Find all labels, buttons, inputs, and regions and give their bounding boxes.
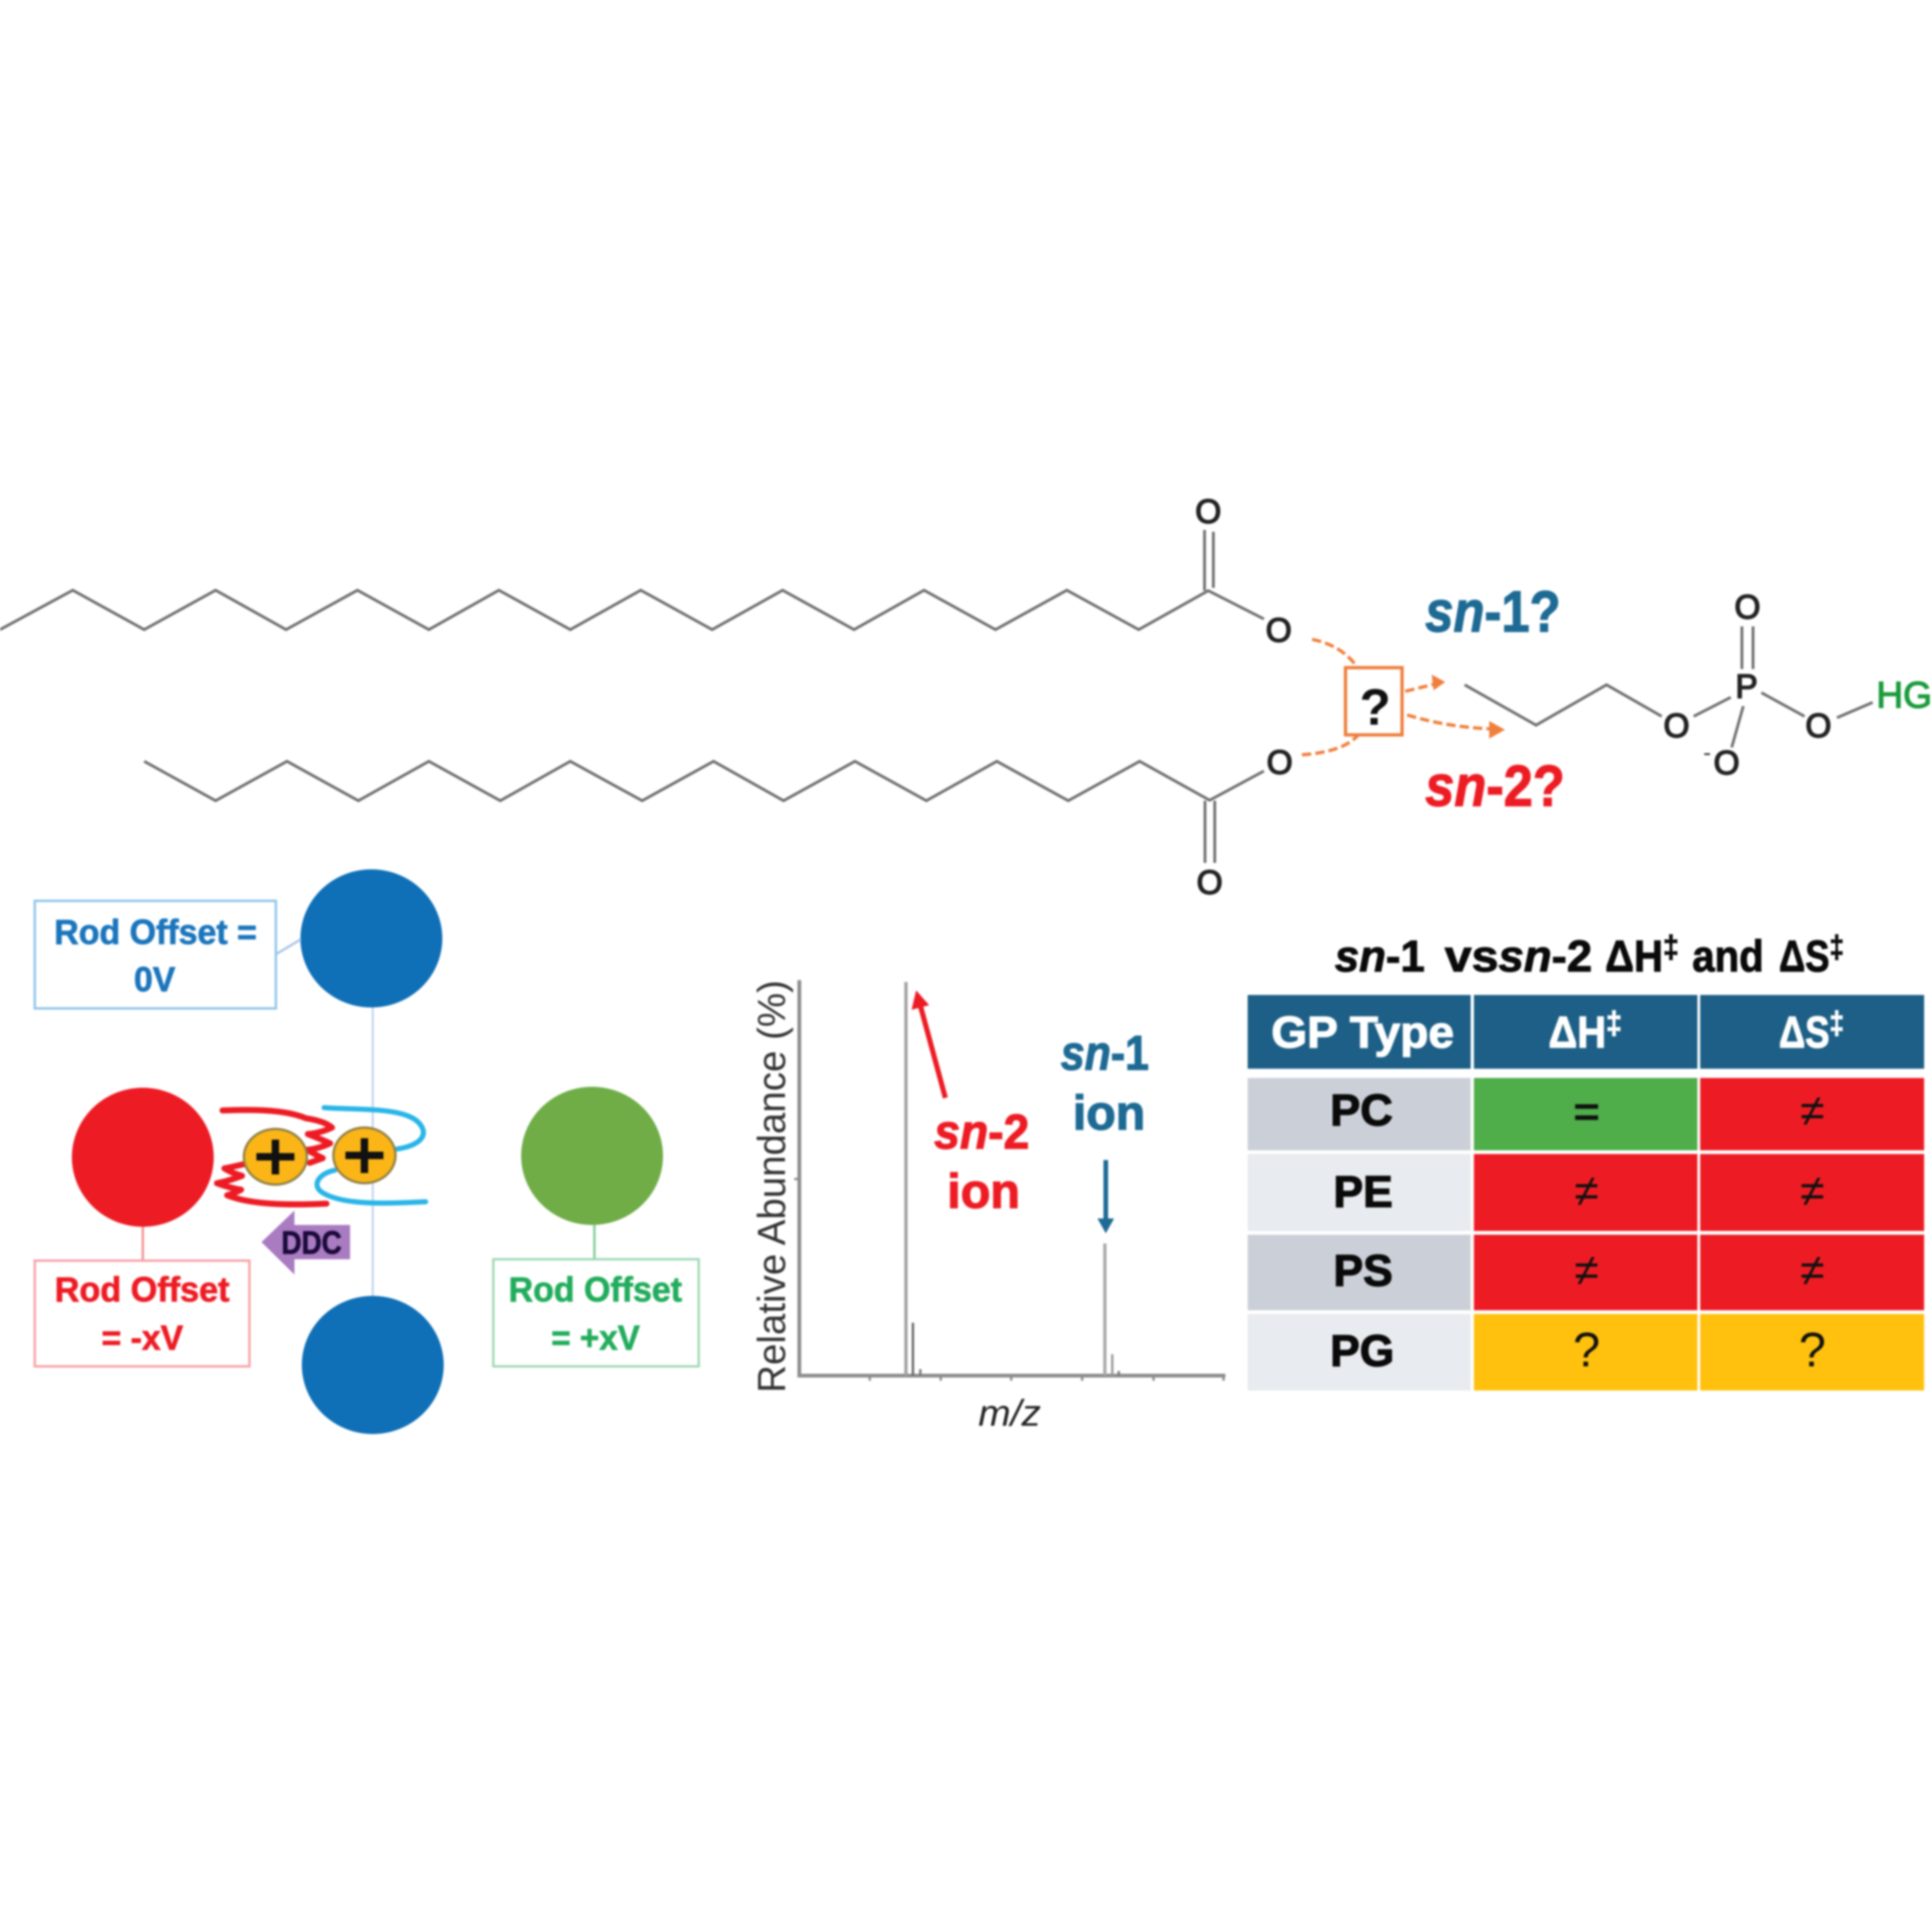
table title: sn-2 — [1498, 931, 1592, 981]
table header: ΔS — [1779, 1007, 1841, 1057]
rod: green — [521, 1087, 663, 1225]
table title — [1335, 929, 1844, 981]
annotation: sn-1 ion: ion — [1073, 1086, 1145, 1140]
callout: rod offset 0V: 0V — [134, 960, 175, 999]
row: PG: ? — [1799, 1323, 1826, 1377]
callout: rod offset -xV: = -xV — [102, 1318, 183, 1357]
table header: ‡ — [1606, 1005, 1622, 1040]
row: PE: PE — [1333, 1167, 1393, 1217]
table title: ΔH — [1605, 931, 1669, 981]
lower fatty acyl chain — [144, 744, 1293, 901]
glycerol and phosphate headgroup: P — [1735, 668, 1758, 705]
red lipid tails — [217, 1110, 332, 1205]
row: PC: = — [1574, 1087, 1600, 1136]
table title: vs — [1445, 931, 1498, 981]
cyan lipid tails — [317, 1108, 426, 1203]
table title: ‡ — [1830, 929, 1844, 964]
glycerol and phosphate headgroup — [1465, 589, 1932, 782]
row: PG: PG — [1330, 1326, 1394, 1376]
row: PE: ≠ — [1575, 1166, 1599, 1216]
callout: rod offset +xV: Rod Offset — [509, 1270, 682, 1309]
glycerol and phosphate headgroup: O — [1664, 708, 1690, 745]
rod: top blue — [300, 869, 442, 1007]
table header: GP Type — [1271, 1007, 1454, 1057]
annotation: sn-2 ion — [912, 990, 1029, 1218]
glycerol and phosphate headgroup: HG — [1876, 674, 1932, 715]
callout: rod offset +xV — [493, 1225, 699, 1366]
table header: ΔH — [1549, 1007, 1613, 1057]
row: PS: PS — [1333, 1246, 1393, 1295]
question mark box with dashed arrows — [1302, 639, 1505, 755]
molecule: glycerophospholipid structure — [0, 493, 1932, 901]
row: PS: ≠ — [1575, 1245, 1599, 1295]
table: activation parameters by GP type — [1248, 995, 1924, 1390]
arrow: DDC — [261, 1211, 350, 1275]
row: PS: ≠ — [1800, 1245, 1824, 1295]
annotation: sn-1 ion: sn-1 — [1061, 1026, 1149, 1080]
glycerol and phosphate headgroup: O — [1805, 708, 1831, 745]
upper fatty acyl chain: O — [1266, 612, 1292, 649]
rod: red — [72, 1088, 214, 1227]
row: PE — [1248, 1154, 1924, 1231]
row: PC: ≠ — [1800, 1086, 1824, 1135]
callout: rod offset 0V: Rod Offset = — [54, 912, 257, 951]
table title: and — [1692, 931, 1764, 981]
annotation: sn-2 ion: sn-2 — [934, 1105, 1029, 1159]
question mark box with dashed arrows: ? — [1359, 679, 1391, 736]
row: PS — [1248, 1235, 1924, 1310]
table title: sn-1 — [1335, 931, 1425, 981]
mass spectrum — [750, 980, 1225, 1434]
glycerol and phosphate headgroup: O — [1714, 745, 1740, 782]
annotation: sn-1 ion — [1061, 1026, 1149, 1233]
table header — [1248, 995, 1924, 1069]
label: sn-1?: sn-1? — [1425, 580, 1561, 644]
y axis label: Relative Abundance (%) — [750, 980, 793, 1393]
callout: rod offset -xV: Rod Offset — [55, 1270, 230, 1309]
charge: plus ion left — [244, 1129, 307, 1185]
x axis label: m/z — [978, 1392, 1041, 1434]
lower fatty acyl chain: O — [1267, 744, 1293, 781]
upper fatty acyl chain: O — [1195, 493, 1221, 530]
callout: rod offset -xV — [35, 1227, 249, 1366]
charge: plus ion right — [333, 1128, 395, 1183]
spectrum axes — [794, 980, 1225, 1381]
table title: ΔS — [1779, 931, 1841, 981]
glycerol and phosphate headgroup: O — [1734, 589, 1760, 626]
axis line between blue rods — [372, 1007, 374, 1296]
arrow: DDC: DDC — [281, 1224, 342, 1261]
lower fatty acyl chain: O — [1197, 864, 1223, 901]
quadrupole diagram — [35, 869, 699, 1434]
spectrum peaks — [906, 982, 1119, 1376]
row: PC: PC — [1330, 1085, 1393, 1135]
rod: bottom blue — [302, 1296, 444, 1434]
label: sn-2?: sn-2? — [1425, 754, 1565, 818]
callout: rod offset 0V — [35, 901, 301, 1008]
glycerol and phosphate headgroup: - — [1703, 740, 1711, 765]
row: PE: ≠ — [1800, 1166, 1824, 1216]
row: PG: ? — [1573, 1323, 1600, 1377]
callout: rod offset +xV: = +xV — [551, 1318, 640, 1357]
row: PG — [1248, 1314, 1924, 1390]
table header: ‡ — [1830, 1005, 1844, 1040]
table title: ‡ — [1663, 929, 1679, 964]
upper fatty acyl chain — [0, 493, 1292, 649]
row: PC — [1248, 1078, 1924, 1150]
annotation: sn-2 ion: ion — [947, 1164, 1020, 1218]
